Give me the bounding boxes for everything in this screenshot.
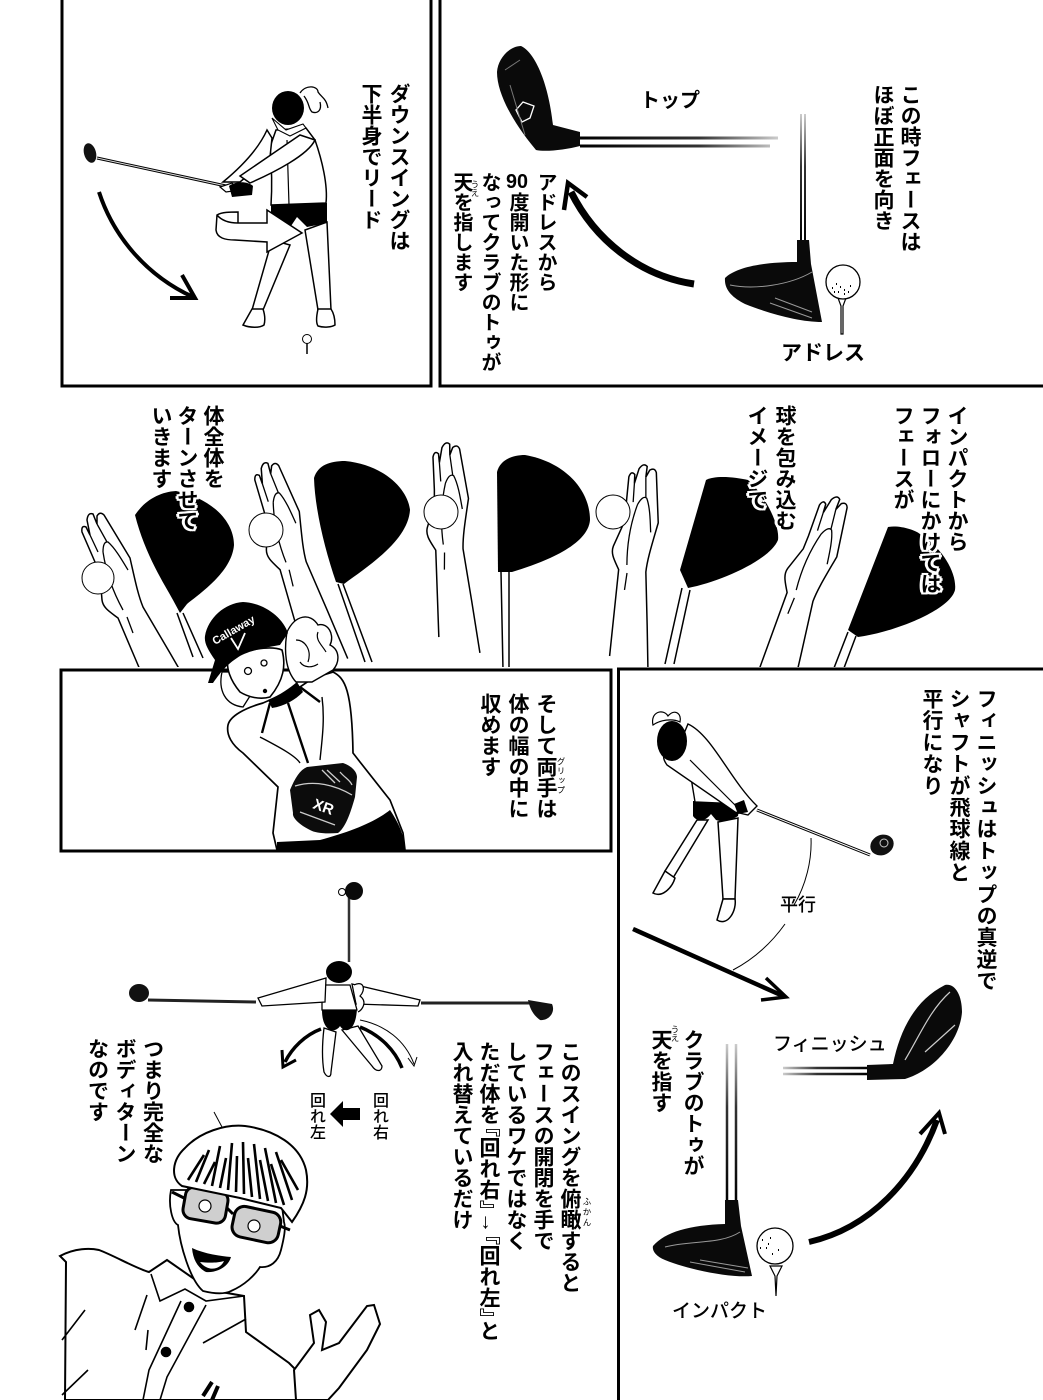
label: top: トップ bbox=[640, 90, 700, 112]
text: turn whole body: ターンさせて bbox=[175, 405, 198, 531]
mouth bbox=[192, 1248, 231, 1272]
head and face bbox=[170, 1190, 285, 1293]
golfer: close-up with club: Callaway bbox=[210, 613, 258, 648]
label: impact: インパクト bbox=[672, 1301, 767, 1322]
text: face direction: この時フェースは bbox=[898, 84, 921, 252]
text: complete body turn bbox=[86, 1038, 164, 1164]
club: finish bbox=[783, 985, 962, 1080]
text: face direction: ほぼ正面を向き bbox=[871, 84, 894, 231]
club: right bbox=[421, 1000, 553, 1020]
text: impact to follow bbox=[891, 405, 968, 594]
text: impact to follow: インパクトから bbox=[945, 405, 968, 552]
text: wrapping the ball: イメージで bbox=[745, 405, 768, 510]
glasses bbox=[172, 1186, 290, 1245]
text: overhead swing explanation: このスイングを俯瞰すると bbox=[558, 1041, 581, 1293]
eyes bbox=[199, 1200, 260, 1232]
label: address: アドレス bbox=[781, 342, 865, 365]
hand and club 4 bbox=[596, 464, 778, 667]
panel: finish bbox=[618, 669, 1043, 1400]
text: finish explanation: フィニッシュはトップの真逆で bbox=[974, 688, 997, 992]
text: overhead swing explanation: 入れ替えているだけ bbox=[450, 1041, 473, 1230]
collar and placket bbox=[62, 1274, 246, 1400]
hand: open palm bbox=[294, 1305, 380, 1400]
text: finish explanation: 平行になり bbox=[920, 688, 943, 796]
hand and club 3 bbox=[424, 442, 590, 667]
hand and club 1 bbox=[81, 491, 234, 667]
arrow: impact to finish bbox=[809, 1113, 945, 1242]
text: overhead swing explanation: フェースの開閉を手で bbox=[531, 1041, 554, 1251]
arrow: downswing path bbox=[99, 192, 195, 298]
text: top explanation: アドレスから bbox=[534, 172, 556, 292]
golfer: finish bbox=[653, 712, 897, 922]
arrow: address to top bbox=[564, 183, 694, 284]
text: top explanation: 天を指します bbox=[450, 172, 472, 292]
label: finish: フィニッシュ bbox=[773, 1034, 887, 1055]
club: address position bbox=[725, 114, 822, 322]
text: impact to follow: フェースが bbox=[891, 405, 914, 510]
hand and club 5 bbox=[759, 496, 956, 667]
club: impact bbox=[653, 1044, 752, 1276]
text: finish explanation bbox=[920, 688, 997, 992]
arrow: right to left turn bbox=[330, 1101, 360, 1127]
text: hands in body width: そして両手は bbox=[534, 693, 557, 819]
text: hands in body width: 収めます bbox=[478, 693, 501, 777]
text: top explanation bbox=[450, 172, 558, 372]
text: overhead swing explanation: ただ体 を 『回れ右 』 → 『回れ左 』 と bbox=[477, 1041, 500, 1341]
text: complete body turn: なのです bbox=[86, 1038, 108, 1122]
text: downswing lower body: ダウンスイングは bbox=[387, 83, 410, 251]
label: turn left: 回れ左 bbox=[307, 1092, 324, 1140]
golfer: downswing bbox=[82, 87, 335, 327]
text: downswing lower body: 下半身でリード bbox=[359, 83, 382, 230]
overhead swing diagram bbox=[129, 882, 553, 1127]
text: complete body turn: ボディターン bbox=[113, 1038, 136, 1164]
text: hands in body width: 体の幅の中に bbox=[506, 693, 529, 819]
ruby: ue top: うえ bbox=[470, 180, 480, 197]
club: pointing up bbox=[338, 882, 363, 962]
character: presenter with glasses bbox=[60, 1112, 380, 1400]
text: face direction bbox=[871, 84, 921, 252]
golfer: close-up with club bbox=[205, 602, 405, 850]
text: turn whole body bbox=[149, 405, 224, 532]
arrow: body rotation bbox=[216, 210, 302, 252]
club: top position bbox=[497, 46, 778, 151]
panel: hands within body width bbox=[61, 602, 611, 851]
label: parallel: 平行 bbox=[780, 895, 816, 915]
hand and club 2 bbox=[234, 461, 410, 662]
text: turn whole body: いきます bbox=[149, 405, 172, 489]
text: complete body turn: つまり完全な bbox=[140, 1038, 164, 1164]
row: clubs and hands sequence bbox=[81, 442, 956, 667]
label: turn right: 回れ右 bbox=[370, 1092, 387, 1140]
text: top explanation: 90 度開いた形に bbox=[506, 172, 528, 312]
text: turn whole body: 体全体を bbox=[201, 405, 224, 489]
text: hands in body width bbox=[478, 693, 557, 819]
arrow: turn right bbox=[360, 1020, 417, 1068]
text: impact to follow: フォローにかけては bbox=[918, 405, 941, 594]
hair bbox=[174, 1112, 307, 1222]
golfer: close-up with club: XR bbox=[311, 796, 336, 819]
golfer: overhead view bbox=[258, 961, 420, 1076]
club: left bbox=[129, 984, 256, 1002]
text: toe points to sky: 天を指す bbox=[649, 1029, 672, 1113]
parallel pointer line bbox=[733, 838, 811, 970]
icon: golf ball bbox=[826, 265, 860, 334]
ruby: fukan: ふかん bbox=[582, 1197, 592, 1228]
text: overhead swing explanation: しているワケではなく bbox=[504, 1041, 527, 1251]
icon: golf ball on tee bbox=[302, 334, 312, 354]
panel: top and address bbox=[440, 0, 1043, 386]
ruby: grip: グリップ bbox=[556, 757, 566, 795]
text: wrapping the ball bbox=[745, 405, 796, 531]
text: top explanation: なってクラブのトゥが bbox=[478, 172, 500, 372]
text: toe points to sky: クラブのトゥが bbox=[681, 1029, 704, 1176]
text: overhead swing explanation bbox=[450, 1041, 582, 1341]
text: wrapping the ball: 球を包み込む bbox=[773, 405, 796, 531]
text: finish explanation: シャフトが飛球線と bbox=[947, 688, 970, 883]
panel: downswing bbox=[62, 0, 431, 386]
arrow: flight line bbox=[633, 929, 786, 1000]
icon: golf ball on tee impact bbox=[757, 1228, 793, 1296]
ruby: ue impact: うえ bbox=[670, 1025, 680, 1042]
shirt and body bbox=[60, 1249, 296, 1400]
text: downswing lower body bbox=[359, 83, 410, 251]
text: toe points to sky bbox=[649, 1029, 704, 1176]
arrow: turn left bbox=[282, 1029, 321, 1067]
